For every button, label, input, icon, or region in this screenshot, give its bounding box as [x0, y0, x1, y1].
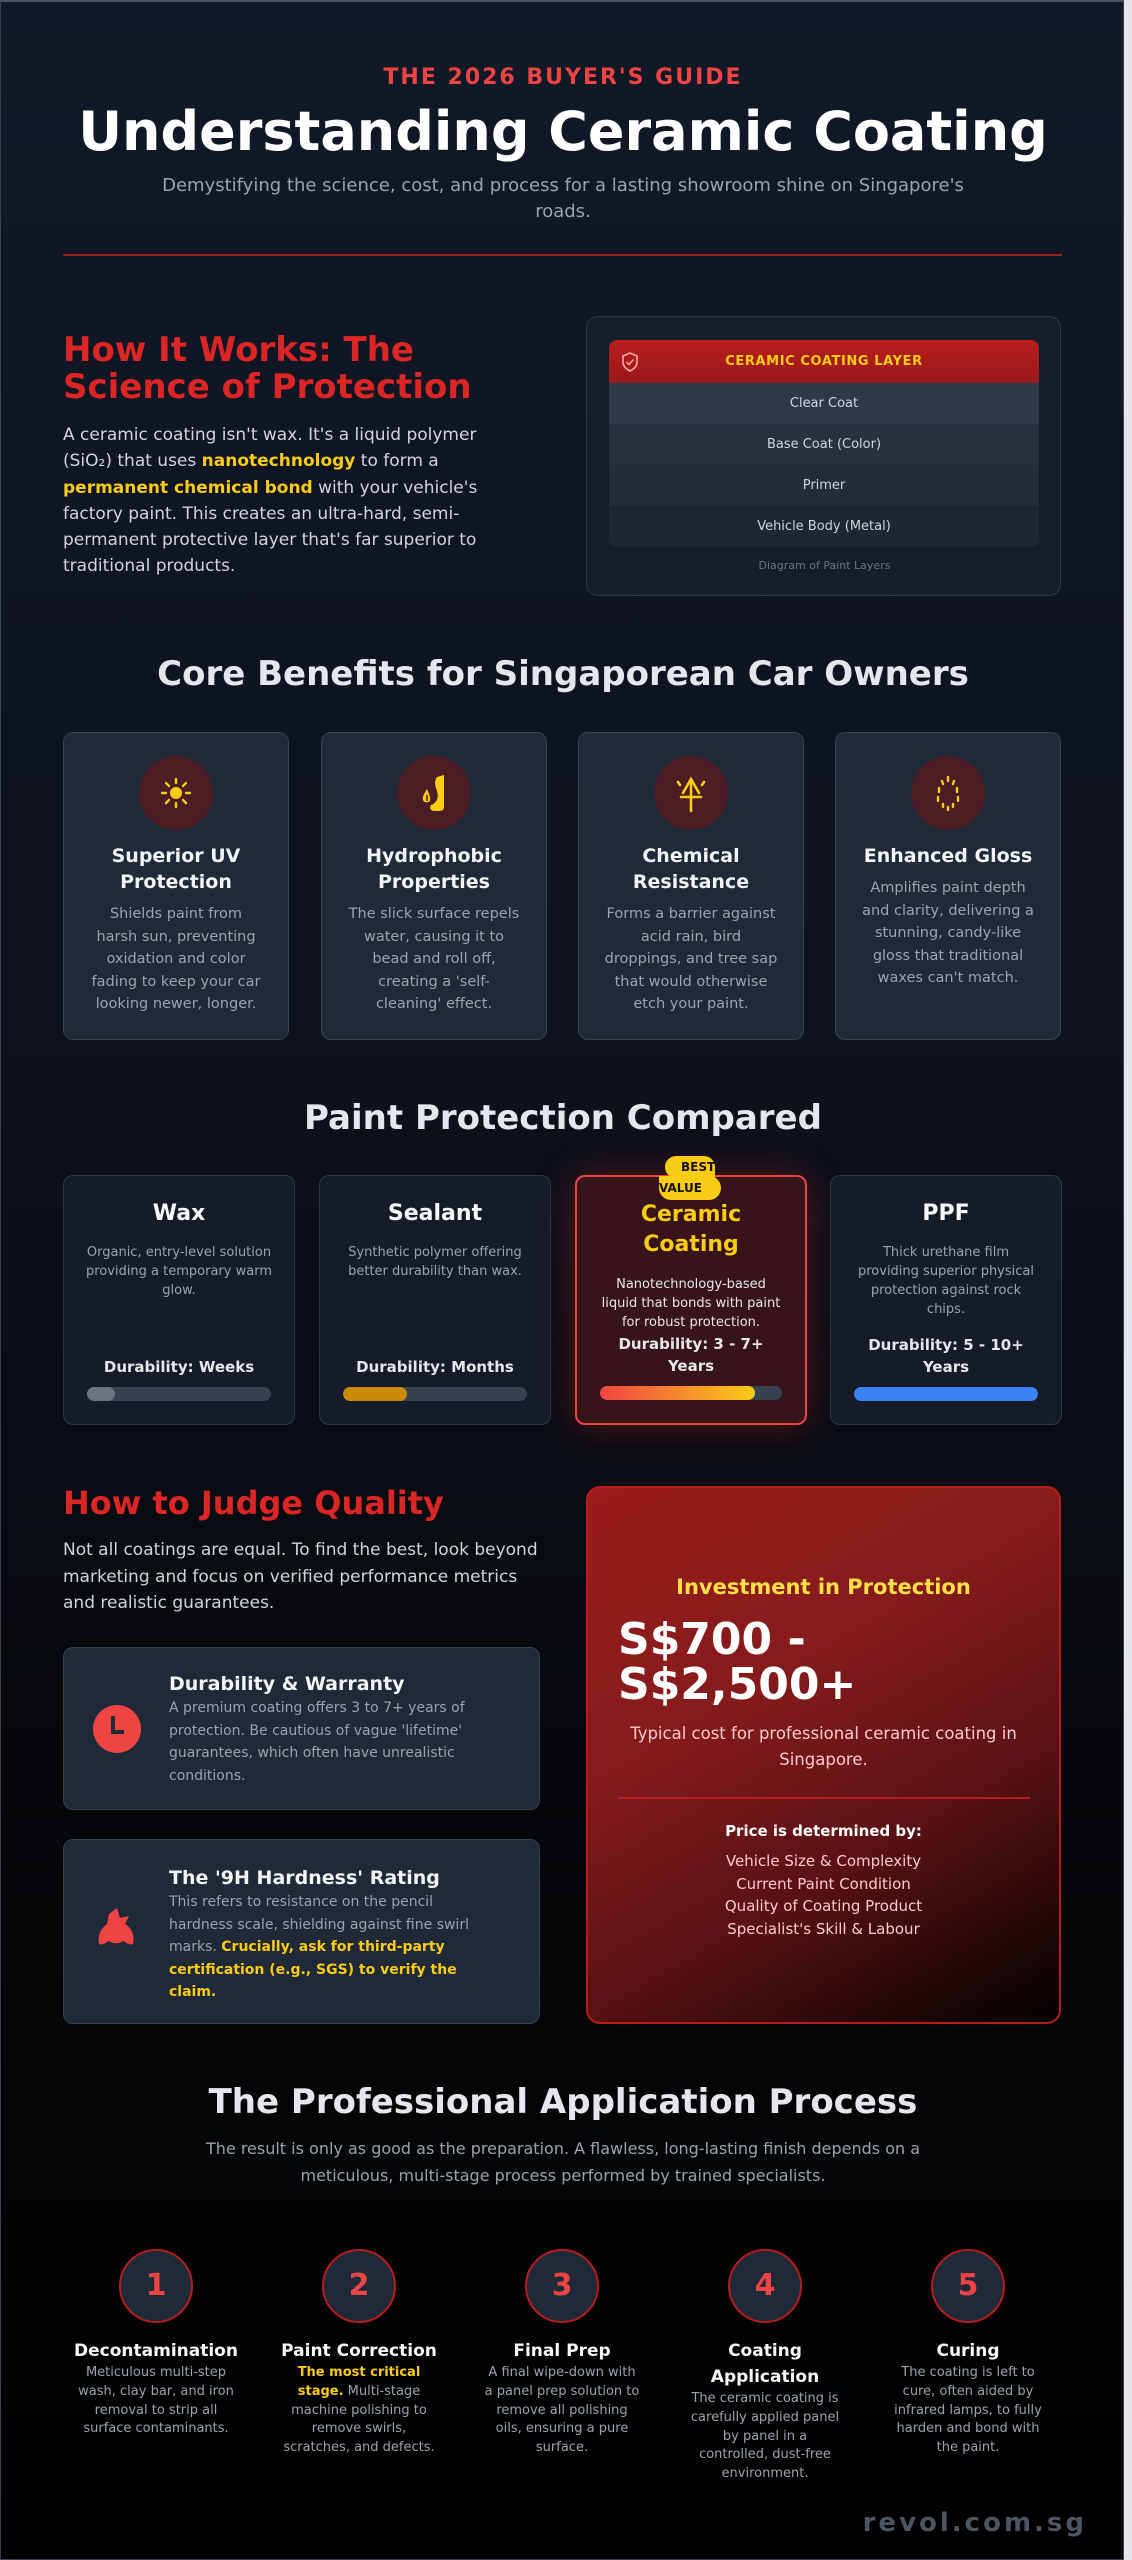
- card: chemical: Forms a barrier against acid rain, bird droppings, and tree sap that would otherwise etch your paint.: [605, 906, 777, 1012]
- price: [618, 1614, 856, 1710]
- text: quality intro: Not all coatings are equal. To find the best, look beyond marketing and focus on verified performance metrics and realistic guarantees.: [63, 1540, 538, 1613]
- card: ceramic coating: Ceramic Coating: [641, 1202, 741, 1257]
- step 1: Decontamination: [74, 2341, 238, 2361]
- badge: best value: VALUE: [659, 1181, 702, 1195]
- heading: judge quality: How to Judge Quality: [63, 1484, 444, 1522]
- card: UV: Superior UV Protection: [112, 845, 240, 893]
- panel: paint layer diagram: [586, 316, 1061, 596]
- step 2: Paint Correction: [281, 2341, 437, 2361]
- step 1: 1: [146, 2268, 166, 2303]
- step 3: A final wipe-down with a panel prep solution to remove all polishing oils, ensuring a pure surface.: [485, 2365, 639, 2455]
- card: wax: Durability: Weeks: [104, 1358, 254, 1376]
- card: wax: Wax: [153, 1201, 205, 1226]
- step 4: [691, 2249, 839, 2481]
- ceramic layer: CERAMIC COATING LAYER: [725, 354, 923, 369]
- card: 9H hardness: This refers to resistance on the pencil hardness scale, shielding against fine swirl marks. Crucially, ask for third-party certification (e.g., SGS) to verify the claim.: [169, 1894, 469, 2000]
- step 1: [74, 2249, 238, 2436]
- card: ppf: Durability: 5 - 10+ Years: [868, 1336, 1024, 1376]
- card: UV: Shields paint from harsh sun, preventing oxidation and color fading to keep your car looking newer, longer.: [92, 906, 260, 1012]
- card: UV: [63, 732, 289, 1040]
- card: 9H hardness: [63, 1839, 540, 2024]
- card: hydrophobic: The slick surface repels water, causing it to bead and roll off, creating a 'self-cleaning' effect.: [349, 906, 519, 1012]
- diagram layers: Clear Coat: [790, 396, 858, 411]
- step 5: Curing: [936, 2341, 1000, 2361]
- diagram layers: [609, 340, 1039, 547]
- investment title: Investment in Protection: [676, 1575, 971, 1599]
- step 4: The ceramic coating is carefully applied panel by panel in a controlled, dust-free environment.: [691, 2391, 839, 2481]
- icon: water hand: [397, 756, 471, 830]
- text: how it works: A ceramic coating isn't wax. It's a liquid polymer (SiO₂) that uses nanotechnology to form a permanent chemical bond with your vehicle's factory paint. This creates an ultra-hard, semi-permanent protective layer that's far superior to traditional products.: [63, 425, 477, 576]
- card: sealant: Durability: Months: [356, 1358, 514, 1376]
- step 5: [894, 2249, 1042, 2455]
- step 1: Meticulous multi-step wash, clay bar, and iron removal to strip all surface contaminants.: [78, 2365, 234, 2436]
- caption: Diagram of Paint Layers: [759, 559, 890, 572]
- card: hydrophobic: [321, 732, 547, 1040]
- card: durability warranty: [63, 1647, 540, 1810]
- icon: sun: [139, 756, 213, 830]
- price factors: Vehicle Size & Complexity: [726, 1852, 921, 1870]
- card: ppf: Thick urethane film providing superior physical protection against rock chips.: [858, 1245, 1034, 1317]
- diagram layers: Base Coat (Color): [767, 437, 881, 452]
- text: process intro: The result is only as good as the preparation. A flawless, long-lasting finish depends on a meticulous, multi-stage process performed by trained specialists.: [206, 2139, 920, 2185]
- step 4: Coating Application: [711, 2341, 819, 2387]
- card: wax: Organic, entry-level solution providing a temporary warm glow.: [86, 1245, 272, 1298]
- card: sealant: Synthetic polymer offering better durability than wax.: [348, 1245, 522, 1279]
- icon: clock: [93, 1705, 141, 1753]
- step 3: Final Prep: [513, 2341, 611, 2361]
- diagram layers: Primer: [803, 478, 845, 493]
- card: wax: [63, 1175, 295, 1425]
- price factors: Quality of Coating Product: [725, 1897, 922, 1915]
- card: ceramic coating: [575, 1175, 807, 1425]
- badge: best value: BEST: [681, 1160, 715, 1174]
- price factors: Specialist's Skill & Labour: [727, 1920, 920, 1938]
- card: gloss: [835, 732, 1061, 1040]
- subtitle: Demystifying the science, cost, and process for a lasting showroom shine on Singapore's roads.: [162, 175, 964, 222]
- card: ceramic coating: Durability: 3 - 7+ Years: [618, 1335, 764, 1375]
- card: sealant: [319, 1175, 551, 1425]
- ceramic layer: [609, 340, 1039, 383]
- card: chemical: Chemical Resistance: [633, 845, 749, 893]
- step 5: 5: [958, 2268, 978, 2303]
- step 2: 2: [349, 2268, 369, 2303]
- diagram layers: Vehicle Body (Metal): [757, 519, 891, 534]
- step 3: [485, 2249, 639, 2455]
- card: durability warranty: A premium coating offers 3 to 7+ years of protection. Be cautious of vague 'lifetime' guarantees, which often have unrealistic conditions.: [169, 1700, 465, 1784]
- card: ceramic coating: Nanotechnology-based liquid that bonds with paint for robust protection.: [602, 1277, 780, 1330]
- step 2: The most critical stage. Multi-stage machine polishing to remove swirls, scratches, and defects.: [283, 2365, 435, 2455]
- icon: shield arrow: [654, 756, 728, 830]
- card: gloss: Enhanced Gloss: [864, 845, 1032, 867]
- price: S$700 -: [618, 1614, 806, 1665]
- step 2: [281, 2249, 437, 2455]
- heading: process: The Professional Application Process: [209, 2082, 917, 2122]
- icon: hardness: [98, 1908, 134, 1944]
- price note: Typical cost for professional ceramic coating in Singapore.: [630, 1724, 1017, 1769]
- heading: core benefits: Core Benefits for Singaporean Car Owners: [157, 654, 969, 694]
- icon: sparkle: [911, 756, 985, 830]
- card: chemical: [578, 732, 804, 1040]
- step 3: 3: [552, 2268, 572, 2303]
- heading: how it works: How It Works: The Science of Protection: [63, 330, 472, 407]
- price factors: Current Paint Condition: [736, 1874, 911, 1892]
- price factors: [725, 1822, 922, 1938]
- step 5: The coating is left to cure, often aided by infrared lamps, to fully harden and bond with the paint.: [894, 2365, 1042, 2455]
- step 4: 4: [755, 2268, 775, 2303]
- price: S$2,500+: [618, 1659, 856, 1710]
- title: Understanding Ceramic Coating: [78, 100, 1048, 163]
- eyebrow: THE 2026 BUYER'S GUIDE: [383, 65, 743, 90]
- card: durability warranty: Durability & Warranty: [169, 1673, 405, 1695]
- heading: compared: Paint Protection Compared: [304, 1098, 822, 1138]
- footer brand: revol.com.sg: [863, 2508, 1087, 2538]
- card: ppf: PPF: [922, 1201, 970, 1226]
- card: 9H hardness: The '9H Hardness' Rating: [169, 1867, 440, 1889]
- price factors: Price is determined by:: [725, 1822, 922, 1840]
- card: ppf: [830, 1175, 1062, 1425]
- card: gloss: Amplifies paint depth and clarity, delivering a stunning, candy-like gloss that traditional waxes can't match.: [862, 880, 1034, 986]
- card: hydrophobic: Hydrophobic Properties: [366, 845, 502, 893]
- card: sealant: Sealant: [388, 1201, 482, 1226]
- badge: best value: [659, 1156, 721, 1200]
- panel: investment: [586, 1486, 1061, 2024]
